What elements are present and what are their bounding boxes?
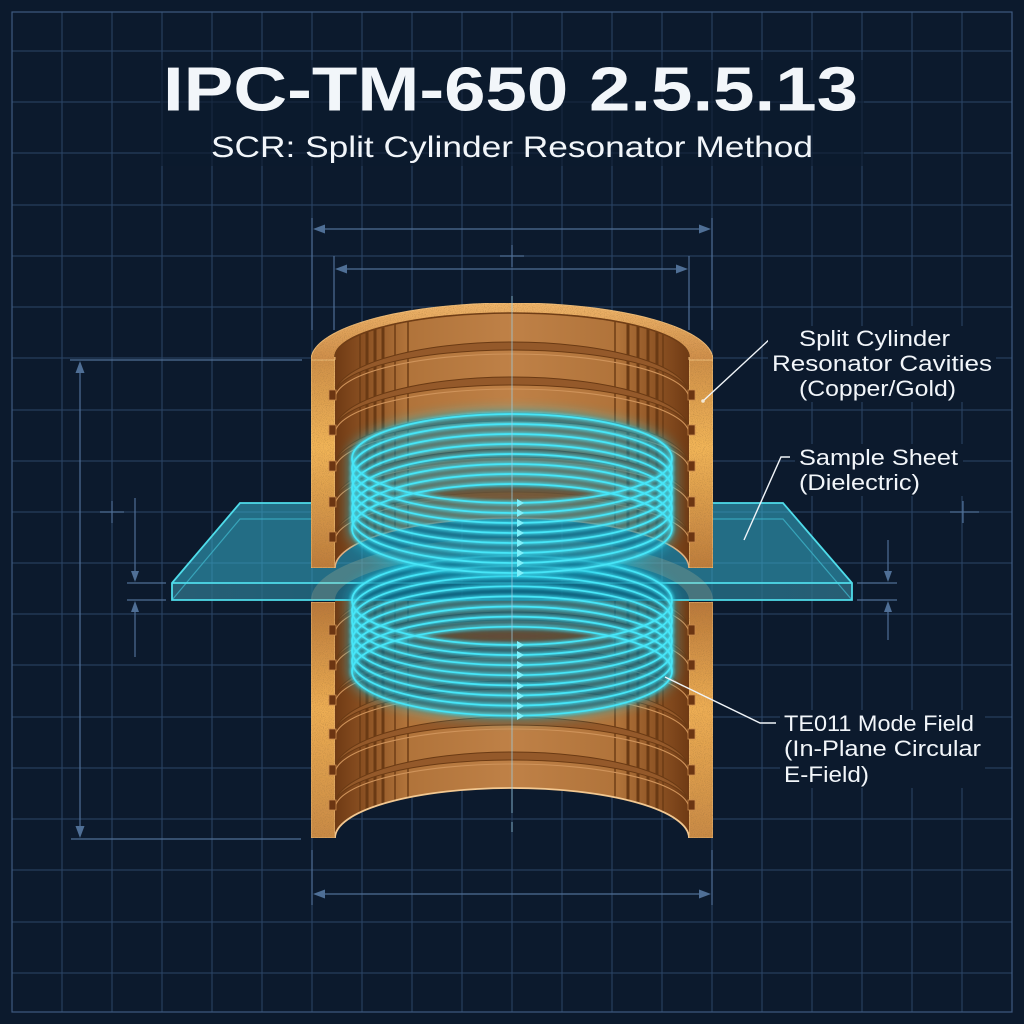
upper ring stack — [352, 414, 672, 573]
dimension: inner diameter top — [334, 256, 689, 330]
dimension: outer diameter top — [312, 218, 712, 330]
upper cavity back wall — [335, 313, 689, 568]
label: field — [780, 710, 985, 788]
label: cavities — [768, 326, 996, 402]
label: sample sheet: Sample Sheet — [799, 445, 958, 470]
center axis line — [511, 296, 513, 832]
upper TE011 field rings — [352, 414, 672, 577]
lower cylinder wall right — [689, 602, 713, 838]
lower cavity bottom edge — [335, 788, 689, 838]
dimension: sheet thickness right — [857, 540, 897, 640]
title shade — [160, 60, 864, 166]
inner rim edge — [335, 313, 689, 357]
lower cavity ribs and bands — [336, 601, 688, 812]
label: cavities: (Copper/Gold) — [799, 376, 956, 401]
upper wall notches — [329, 390, 695, 542]
sheet front face — [172, 583, 852, 600]
top rim — [311, 303, 713, 360]
title: IPC-TM-650 2.5.5.13 — [163, 56, 858, 124]
leader: sample sheet — [744, 457, 790, 540]
dimension: overall height left — [70, 360, 302, 839]
label: field: TE011 Mode Field — [784, 711, 974, 736]
sheet edges — [172, 519, 852, 600]
lower field tint — [352, 556, 672, 716]
upper cavity ribs and bands — [336, 322, 688, 540]
sheet top surface — [172, 503, 852, 583]
upper wall left — [311, 360, 335, 568]
dimension: sheet thickness left — [127, 498, 166, 657]
lower ring stack — [352, 556, 672, 716]
leader: cavities — [701, 338, 790, 403]
lower field arrows — [517, 641, 524, 720]
upper field halo — [352, 414, 672, 574]
dimension: outer diameter bottom — [312, 850, 712, 905]
lower cylinder cavity — [335, 577, 689, 840]
subtitle: SCR: Split Cylinder Resonator Method — [211, 131, 813, 164]
label: cavities: Split Cylinder — [799, 326, 950, 351]
leader: field — [665, 677, 776, 723]
lower wall notches — [329, 625, 695, 810]
upper cavity bottom edge — [335, 518, 689, 568]
ghost of lower rim through sheet — [311, 538, 713, 600]
upper field lens — [417, 489, 607, 501]
lower field lens — [417, 630, 607, 642]
upper field tint — [352, 414, 672, 574]
lower TE011 field rings — [352, 556, 672, 720]
sample sheet — [172, 503, 852, 600]
lower cylinder wall left — [311, 602, 335, 838]
label: sample sheet — [795, 444, 963, 496]
label: field: (In-Plane Circular — [784, 736, 981, 761]
upper field arrows — [517, 499, 524, 577]
upper wall right — [689, 360, 713, 568]
label: field: E-Field) — [784, 762, 869, 787]
lower field halo — [352, 556, 672, 716]
upper cylinder — [311, 300, 713, 570]
label: sample sheet: (Dielectric) — [799, 470, 920, 495]
lower cavity back wall — [335, 600, 689, 838]
registration crosses — [100, 245, 979, 523]
label: cavities: Resonator Cavities — [772, 351, 992, 376]
